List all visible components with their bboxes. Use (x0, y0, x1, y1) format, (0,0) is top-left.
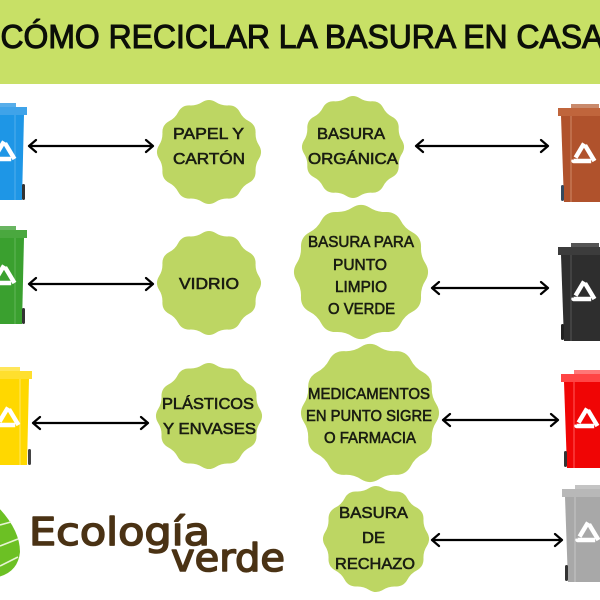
badge: clean point waste: O VERDE (328, 301, 395, 318)
black bin (558, 243, 600, 341)
double arrow: organic to brown bin (416, 140, 548, 152)
title banner (0, 0, 600, 84)
badge: medicines (301, 344, 439, 482)
double arrow: general waste to grey bin (432, 534, 562, 546)
green bin (0, 226, 27, 324)
badge: organic waste (302, 96, 404, 198)
badge: plastics and packaging: Y ENVASES (163, 421, 256, 438)
badge: paper and cardboard (157, 100, 261, 204)
double arrow: green bin to glass (29, 278, 153, 290)
icon: recycle (0, 142, 14, 159)
badge: general waste: RECHAZO (335, 556, 415, 573)
icon: recycle (576, 408, 598, 426)
logo: Ecología Verde (0, 507, 285, 580)
double arrow: medicines to red bin (443, 414, 558, 426)
blue bin (0, 103, 27, 200)
badge: organic waste: ORGÁNICA (308, 149, 398, 168)
logo wordmark: verde (171, 536, 285, 580)
icon: recycle (574, 144, 594, 161)
badge: clean point waste: LIMPIO (335, 279, 387, 296)
icon: recycle (574, 282, 594, 299)
badge: clean point waste (294, 205, 428, 339)
badge: clean point waste: PUNTO (333, 257, 387, 274)
icon: recycle (0, 408, 18, 425)
brown bin (558, 104, 600, 202)
badge: paper and cardboard: PAPEL Y (173, 126, 244, 143)
badge: general waste: BASURA (339, 505, 408, 522)
double arrow: yellow bin to plastics (33, 417, 148, 429)
badge: medicines: EN PUNTO SIGRE (306, 408, 432, 425)
logo wordmark: Ecología (29, 510, 210, 554)
badge: plastics and packaging: PLÁSTICOS (162, 394, 254, 413)
grey bin (562, 485, 600, 582)
double arrow: clean point to black bin (432, 282, 548, 294)
badge: clean point waste: BASURA PARA (308, 234, 414, 251)
badge: organic waste: BASURA (317, 126, 385, 143)
icon: recycle (578, 522, 598, 540)
badge: paper and cardboard: CARTÓN (173, 149, 245, 168)
badge: general waste (323, 486, 429, 592)
double arrow: blue bin to paper (29, 140, 153, 152)
icon: leaf (0, 507, 20, 577)
icon: recycle (0, 266, 14, 283)
badge: medicines: MEDICAMENTOS (308, 386, 430, 403)
badge: plastics and packaging (156, 363, 262, 469)
logo wordmark (29, 510, 285, 580)
badge: medicines: O FARMACIA (324, 430, 416, 447)
red bin (561, 370, 600, 468)
badge: glass (157, 231, 261, 335)
badge: glass: VIDRIO (179, 276, 239, 293)
yellow bin (0, 367, 32, 465)
badge: general waste: DE (362, 530, 385, 547)
